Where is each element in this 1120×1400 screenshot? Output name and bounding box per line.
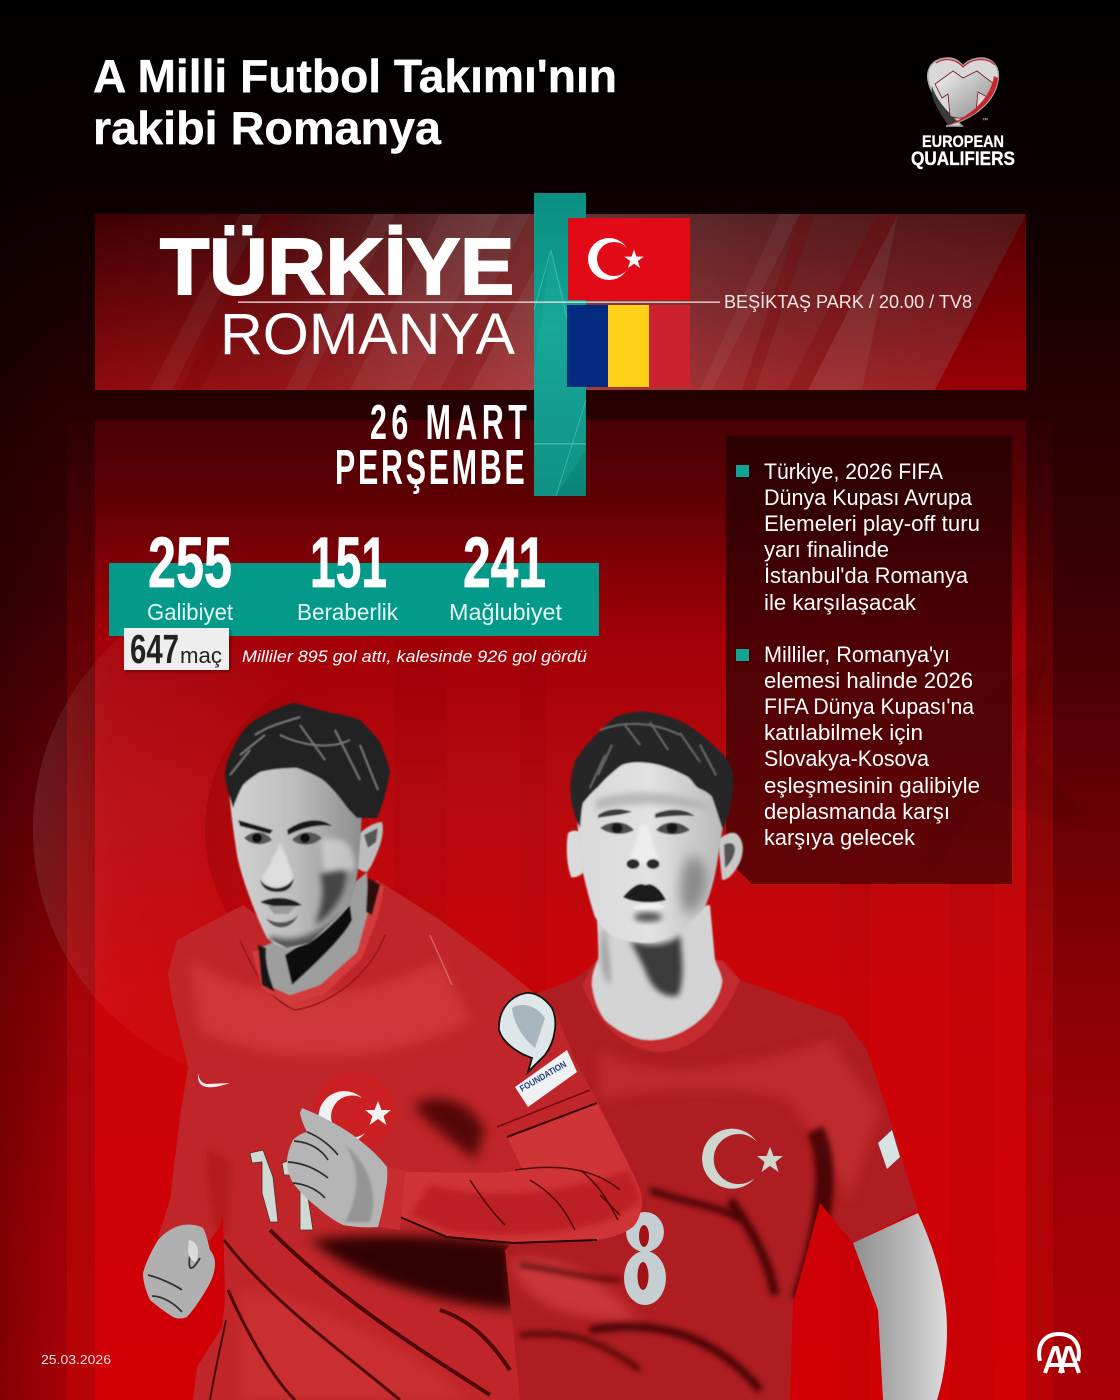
bullet note 1: Dünya Kupası Avrupa <box>764 485 973 510</box>
jersey crest <box>702 1129 783 1189</box>
sleeve patch <box>878 1130 900 1169</box>
bullet note 2: Slovakya-Kosova <box>764 746 930 771</box>
bullet note 2: deplasmanda karşı <box>764 799 950 824</box>
nose <box>262 842 293 889</box>
face <box>225 703 390 950</box>
bullet note 1: yarı finalinde <box>764 537 889 562</box>
logo: agency mark <box>1039 1334 1079 1373</box>
stat: losses: 241 <box>463 524 546 603</box>
neck <box>258 872 380 998</box>
neck and collar <box>582 905 740 1052</box>
logo: European Qualifiers: QUALIFIERS <box>911 149 1015 170</box>
nike swoosh <box>198 1073 230 1087</box>
bullet note 1: ile karşılaşacak <box>764 590 917 615</box>
flag: Romanya <box>567 305 690 387</box>
jersey <box>158 880 642 1400</box>
right arm <box>853 1213 947 1400</box>
stat: wins: Galibiyet <box>147 599 234 625</box>
teal vertical bar <box>534 193 586 496</box>
bullet note 1: Elemeleri play-off turu <box>764 511 980 536</box>
stat: losses <box>449 524 563 625</box>
hair <box>225 703 390 818</box>
date stamp: 25.03.2026 <box>41 1352 111 1367</box>
match date: 26 MART <box>370 395 527 450</box>
hand on chest <box>287 1108 387 1227</box>
total matches badge: 647 <box>130 626 179 672</box>
qualifiers sleeve badge <box>499 993 555 1072</box>
match date: PERŞEMBE <box>335 440 525 495</box>
match date <box>335 395 527 495</box>
jersey number 8 <box>624 1212 666 1305</box>
team: Türkiye: TÜRKİYE <box>160 222 514 311</box>
bullet note 2: FIFA Dünya Kupası'na <box>764 694 975 719</box>
hair <box>570 712 733 830</box>
stat: draws: Beraberlik <box>297 599 398 625</box>
bullet note 2: elemesi halinde 2026 <box>764 668 973 693</box>
bullet note 1: İstanbul'da Romanya <box>764 563 969 588</box>
bullet note 1: Türkiye, 2026 FIFA <box>764 459 943 484</box>
panel: notes <box>726 436 1012 884</box>
panel: head to head stats <box>109 524 599 672</box>
stat: losses: Mağlubiyet <box>449 599 563 625</box>
stat: draws <box>297 524 398 625</box>
eyebrows and eyes <box>598 809 695 818</box>
mouth <box>623 884 666 902</box>
ear <box>357 822 383 872</box>
title <box>93 50 617 154</box>
title: A Milli Futbol Takımı'nın <box>93 50 617 102</box>
nose <box>626 859 640 869</box>
total matches badge: maç <box>180 643 222 668</box>
bullet note 2 <box>736 642 980 850</box>
icon: heart and shirt emblem: ™ <box>982 117 988 124</box>
face <box>570 712 733 943</box>
title: rakibi Romanya <box>93 102 441 154</box>
jersey crest <box>315 1072 395 1152</box>
foundation sleeve patch <box>515 1050 577 1107</box>
stat: draws: 151 <box>310 524 387 603</box>
stat: wins <box>147 524 234 625</box>
total matches badge <box>124 626 231 672</box>
eyebrows and eyes <box>238 820 332 835</box>
mouth <box>260 898 302 907</box>
logo: European Qualifiers: EUROPEAN <box>922 132 1004 151</box>
match info line and venue: BEŞİKTAŞ PARK / 20.00 / TV8 <box>724 292 972 312</box>
bullet note 1 <box>736 459 980 615</box>
bullet note 2: Milliler, Romanya'yı <box>764 642 950 667</box>
logo: European Qualifiers <box>911 58 1015 170</box>
foundation sleeve patch: FOUNDATION <box>518 1059 568 1094</box>
flag: Türkiye <box>568 218 690 300</box>
player: number 11 (left) <box>143 703 642 1400</box>
player: number 8 (right) <box>505 712 947 1400</box>
bullet note 2: katılabilmek için <box>764 720 923 745</box>
bullet note 2: eşleşmesinin galibiyle <box>764 773 980 798</box>
ears <box>567 831 743 880</box>
team: Romanya: ROMANYA <box>220 302 515 367</box>
jersey number 11 <box>250 1150 313 1230</box>
stat: wins: 255 <box>148 524 232 603</box>
jersey <box>505 963 918 1400</box>
goals note: Milliler 895 gol attı, kalesinde 926 gol gördü <box>242 647 588 666</box>
panel: match header <box>95 214 1026 390</box>
left hand <box>143 1225 215 1318</box>
right sleeve and forearm <box>378 1090 642 1243</box>
bullet note 2: karşıya gelecek <box>764 825 916 850</box>
